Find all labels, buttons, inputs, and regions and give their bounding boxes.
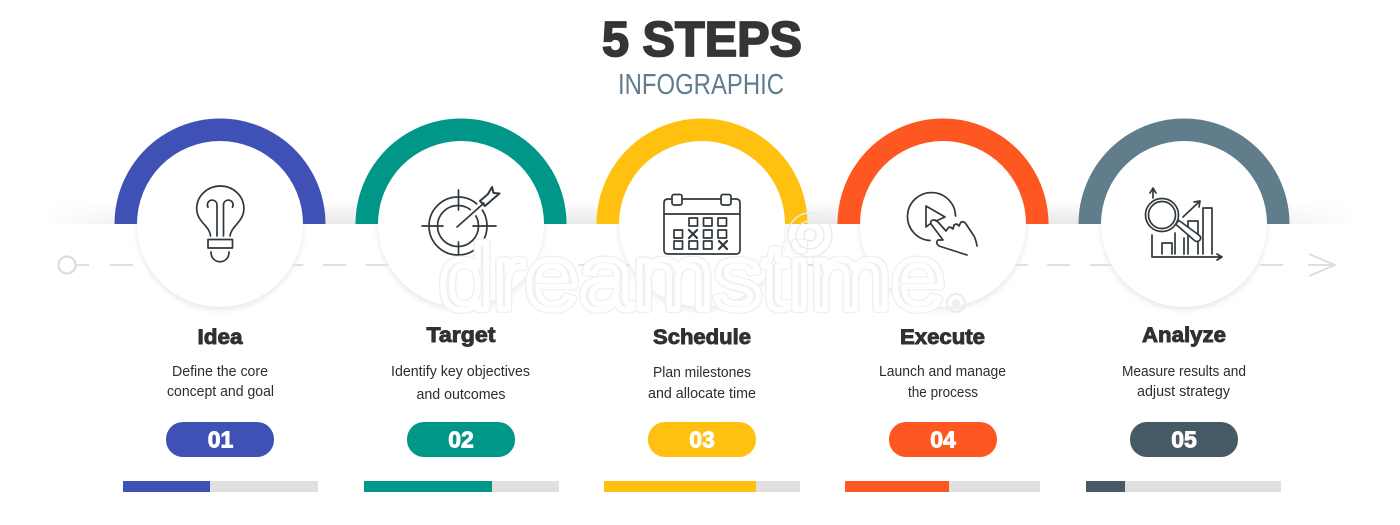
step 5 text: Analyze <box>1142 324 1226 347</box>
step 5 text: Measure results and <box>1122 364 1246 380</box>
badge 02 <box>407 422 515 457</box>
progress bar 4 <box>845 481 1040 492</box>
step 2 text <box>391 324 530 403</box>
step 1: arc and icon disc <box>114 119 326 310</box>
icon: light bulb <box>197 186 244 262</box>
step 4 text: Launch and manage <box>879 364 1006 380</box>
watermark: dreamstime <box>439 227 945 329</box>
icon: hand clicking cursor <box>908 193 977 255</box>
badge 03 <box>648 422 756 457</box>
step 5: arc and icon disc <box>1078 119 1290 310</box>
step 3 text <box>648 326 756 402</box>
progress bar 2 <box>364 481 559 492</box>
progress bar 3 <box>604 481 800 492</box>
subtitle: INFOGRAPHIC <box>618 69 784 101</box>
badge 04 <box>889 422 997 457</box>
step 3 text: Plan milestones <box>653 365 751 381</box>
watermark: dreamstime <box>439 227 945 329</box>
title <box>602 13 802 101</box>
progress bar 1 <box>123 481 318 492</box>
icon: target with arrow <box>422 187 500 262</box>
step 1 text: Define the core <box>172 364 268 380</box>
step 3 text: and allocate time <box>648 386 756 402</box>
step 1 text <box>167 326 274 400</box>
badge 05: 05 <box>1171 426 1197 452</box>
badge 01 <box>166 422 274 457</box>
step 1 text: Idea <box>198 326 243 349</box>
timeline: dashed path with start circle and end arrow <box>58 254 1335 276</box>
step 2: arc and icon disc <box>356 119 566 310</box>
step 2 text: Target <box>426 324 496 347</box>
badge 01: 01 <box>208 426 233 452</box>
step 2 text: Identify key objectives <box>391 364 530 380</box>
step 4 text: Execute <box>900 326 985 349</box>
icon: calendar <box>664 194 740 254</box>
title: 5 STEPS <box>602 13 802 67</box>
step 5 text <box>1122 324 1246 400</box>
badge 05 <box>1130 422 1238 457</box>
progress bar 5 <box>1086 481 1281 492</box>
badge 02: 02 <box>448 426 474 452</box>
step 4 text: the process <box>908 385 978 401</box>
badge 04: 04 <box>930 426 956 452</box>
step 1 text: concept and goal <box>167 384 274 400</box>
step 4: arc and icon disc <box>838 119 1048 310</box>
step 3: arc and icon disc <box>596 119 808 310</box>
step 5 text: adjust strategy <box>1137 384 1231 400</box>
step 3 text: Schedule <box>653 326 751 349</box>
icon: magnifier over bar chart <box>1146 188 1222 260</box>
badge 03: 03 <box>689 426 715 452</box>
shadow band behind the arcs <box>89 208 1311 224</box>
step 2 text: and outcomes <box>416 387 506 403</box>
step 4 text <box>879 326 1006 401</box>
